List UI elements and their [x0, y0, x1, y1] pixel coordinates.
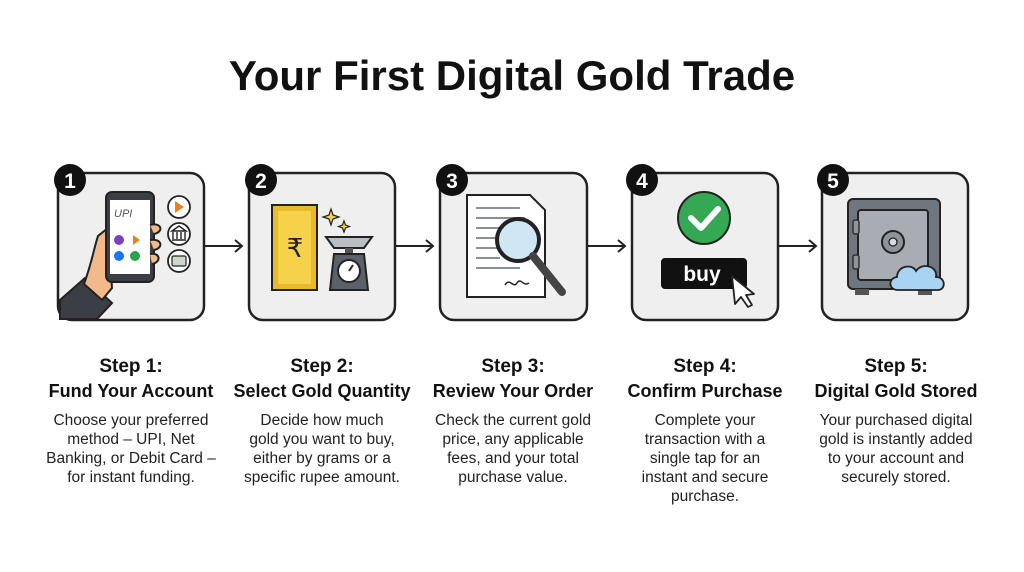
- text: step 2: [233, 356, 411, 486]
- arrow 2-3: [396, 240, 433, 252]
- number badge 3: 3: [446, 170, 458, 193]
- panel: step 3: [436, 164, 587, 320]
- icon: hand with phone: [60, 192, 160, 319]
- text: step 4: [627, 356, 783, 505]
- text: step 4: Step 4:: [673, 356, 737, 377]
- text: step 1: Banking, or Debit Card –: [46, 450, 216, 467]
- text: step 3: Check the current gold: [435, 412, 591, 429]
- text: step 2: either by grams or a: [253, 450, 391, 467]
- text: step 3: [433, 356, 593, 486]
- text: step 1: Step 1:: [99, 356, 163, 377]
- text: step 2: Select Gold Quantity: [233, 381, 411, 401]
- text: step 5: Step 5:: [864, 356, 928, 377]
- text: step 5: gold is instantly added: [819, 431, 973, 448]
- number badge 4: 4: [636, 170, 648, 193]
- icon: document with magnifier: [467, 195, 562, 297]
- text: step 4: Complete your: [655, 412, 755, 429]
- text: step 1: [46, 356, 216, 486]
- text: step 3: purchase value.: [458, 469, 568, 486]
- number badge 4: [626, 164, 658, 196]
- text: step 2: Step 2:: [290, 356, 354, 377]
- text: step 1: for instant funding.: [67, 469, 195, 486]
- icon: gold bar: ₹: [287, 233, 303, 263]
- text: step 5: [814, 356, 978, 486]
- text: step 2: specific rupee amount.: [244, 469, 400, 486]
- text: step 5: Your purchased digital: [820, 412, 972, 429]
- text: step 5: securely stored.: [841, 469, 951, 486]
- text: step 5: to your account and: [828, 450, 964, 467]
- panel: step 2: [245, 164, 395, 320]
- panel: step 1: [54, 164, 204, 320]
- text: step 4: Confirm Purchase: [627, 381, 783, 401]
- text: step 3: Step 3:: [481, 356, 545, 377]
- text: step 4: purchase.: [671, 488, 739, 505]
- arrow 4-5: [779, 240, 816, 252]
- icon: check circle: [678, 192, 730, 244]
- text: step 3: price, any applicable: [442, 431, 584, 448]
- text: step 4: transaction with a: [645, 431, 766, 448]
- number badge 5: 5: [827, 170, 839, 193]
- text: step 3: Review Your Order: [433, 381, 593, 401]
- panel: step 4: [626, 164, 778, 320]
- text: step 4: instant and secure: [642, 469, 768, 486]
- title: Your First Digital Gold Trade: [229, 52, 795, 99]
- panel: step 5: [817, 164, 968, 320]
- number badge 2: [245, 164, 277, 196]
- icon: payment options: [168, 196, 190, 272]
- number badge 1: [54, 164, 86, 196]
- arrow 3-4: [588, 240, 625, 252]
- text: step 1: Fund Your Account: [49, 381, 213, 401]
- arrow 1-2: [205, 240, 242, 252]
- icon: buy button with cursor: buy: [683, 263, 721, 286]
- icon: hand with phone: UPI: [114, 208, 132, 220]
- text: step 2: Decide how much: [260, 412, 384, 429]
- icon: buy button with cursor: [661, 258, 754, 307]
- number badge 3: [436, 164, 468, 196]
- icon: gold bar: [272, 205, 317, 290]
- number badge 2: 2: [255, 170, 267, 193]
- number badge 5: [817, 164, 849, 196]
- text: step 5: Digital Gold Stored: [814, 381, 978, 401]
- icon: safe with cloud: [848, 199, 944, 295]
- text: step 4: single tap for an: [650, 450, 760, 467]
- text: step 3: fees, and your total: [447, 450, 579, 467]
- icon: scale: [323, 209, 372, 290]
- text: step 2: gold you want to buy,: [249, 431, 395, 448]
- number badge 1: 1: [64, 170, 76, 193]
- text: step 1: method – UPI, Net: [67, 431, 195, 448]
- text: step 1: Choose your preferred: [53, 412, 209, 429]
